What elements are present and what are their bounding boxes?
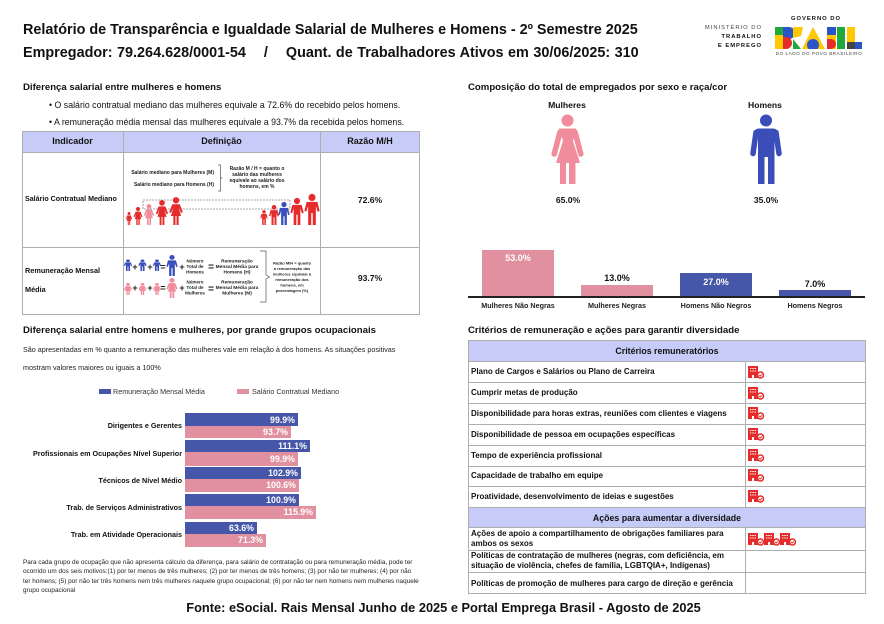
title: Empregador: 79.264.628/0001-54 / Quant. de Trabalhadores Ativos em 30/06/2025: 310	[23, 45, 639, 61]
group: Técnicos	[98, 467, 301, 492]
diagram: salário mediano: homens, em %	[239, 184, 275, 190]
group: Serviços Administrativos: Trab. de Serviços Administrativos	[66, 503, 182, 512]
ação 3: Políticas de promoção de mulheres para cargo de direção e gerência	[471, 579, 733, 588]
ação 2	[471, 551, 724, 570]
text block: nota de rodapé: ocorrido um dos seis motivos:(1) por ter menos de três mulheres; (2) por ter menos de três homens; (3) por não ter mulheres; (4) por não	[23, 568, 411, 575]
panel: tabela de critérios	[468, 340, 866, 594]
diagram: remuneração média: =	[160, 262, 166, 272]
heading: diferença por grupos ocupacionais: Diferença salarial entre homens e mulheres, por grande grupos ocupacionais	[23, 325, 376, 336]
bar chart: raça/cor: 27.0%	[703, 277, 729, 287]
group: Profissionais: 111.1%	[278, 441, 307, 451]
diagram: salário mediano: salário das mulheres	[232, 172, 282, 178]
label: Mulheres: Mulheres	[548, 100, 586, 110]
bar chart: raça/cor: 53.0%	[505, 253, 531, 263]
diagram: remuneração média: Mulheres	[185, 291, 205, 296]
diagram: remuneração média: Homens (H)	[224, 270, 251, 276]
icon: mulher	[552, 114, 584, 184]
bar: Homens Negros	[779, 290, 851, 296]
legend	[99, 387, 339, 396]
diagram: remuneração média: remuneração dos	[275, 277, 309, 282]
critério 1: Plano de Cargos e Salários ou Plano de Carreira	[471, 367, 655, 376]
bar: Homens Não Negros	[680, 273, 752, 296]
value: 65.0%: 65.0%	[556, 195, 580, 205]
text block: explicação	[23, 345, 396, 372]
ação 1	[471, 529, 724, 548]
diagram: remuneração média: Número	[186, 259, 204, 264]
group: Dirigentes e Gerentes: Dirigentes e Gerentes	[108, 421, 182, 430]
diagram: remuneração média: homens, em	[280, 282, 304, 288]
diagram: salário mediano: equivale ao salário dos	[229, 178, 285, 184]
group: Dirigentes e Gerentes	[108, 413, 298, 438]
ação 2: situação de violência, chefes de família, LGBTQIA+, Indígenas)	[471, 561, 710, 570]
icon: homem	[750, 114, 782, 184]
heading: critérios: Critérios de remuneração e ações para garantir diversidade	[468, 325, 739, 336]
diagram: remuneração média: +	[132, 283, 138, 293]
label: Homens: Homens	[748, 100, 782, 110]
critério 4: Disponibilidade de pessoa em ocupações específicas	[471, 430, 675, 439]
ação 2: Políticas de contratação de mulheres (negras, com deficiência, em	[471, 551, 724, 560]
diagram: salário mediano: Salário mediano para Homens (H)	[134, 182, 214, 188]
critério 6: Capacidade de trabalho em equipe	[471, 471, 603, 480]
logo: Ministério do Trabalho e Emprego	[705, 24, 762, 49]
panel: tabela de indicadores: Definição	[201, 136, 242, 146]
text block: nota de rodapé: grupo ocupacional	[23, 587, 75, 594]
diagram: remuneração média: =	[208, 262, 214, 273]
panel: tabela de indicadores	[22, 131, 420, 315]
group: Técnicos: 100.6%	[266, 480, 296, 490]
critério 3: Disponibilidade para horas extras, reuniões com clientes e viagens	[471, 409, 727, 418]
bar chart: raça/cor	[468, 250, 865, 310]
row value: 72.6%: 72.6%	[358, 195, 382, 205]
axis labels	[481, 301, 843, 310]
diagram: remuneração média: a remuneração das	[274, 266, 311, 271]
logo: Ministério do Trabalho e Emprego: MINISTÉRIO DO	[705, 25, 762, 31]
diagram: remuneração média	[124, 250, 312, 302]
group: Serviços Administrativos: 115.9%	[284, 507, 313, 517]
critério 2: Cumprir metas de produção	[471, 388, 578, 397]
text block: bullets: • O salário contratual mediano das mulheres equivale a 72.6% do recebido pelos homens.	[49, 100, 400, 110]
diagram: remuneração média: +	[179, 262, 185, 272]
panel: tabela de indicadores: Razão M/H	[347, 136, 393, 146]
axis labels: Homens Negros	[787, 301, 843, 310]
group: Atividade Operacionais: Trab. em Atividade Operacionais	[71, 530, 182, 539]
bar: Mulheres Negras	[581, 285, 653, 296]
table header	[22, 131, 420, 152]
text block: explicação: São apresentadas em % quanto a remuneração das mulheres vale em relação à dos homens. As situações positivas	[23, 345, 395, 354]
diagram: remuneração média: +	[147, 262, 153, 272]
bar chart: grupos ocupacionais	[33, 413, 316, 547]
axis labels: Mulheres Negras	[588, 301, 646, 310]
ação 1: Ações de apoio a compartilhamento de obrigações familiares para	[471, 529, 724, 538]
diagram: remuneração média: Mensal Média para	[216, 285, 259, 291]
group: Profissionais: 99.9%	[270, 454, 295, 464]
icons: ações adotadas	[748, 533, 796, 546]
text block: nota de rodapé: ter homens; (5) por não ter três homens nem três mulheres naquele grupo ocupacional; (6) por não ter nem homens nem mulheres naquele	[23, 578, 419, 585]
diagram: remuneração média: Homens	[186, 270, 204, 275]
diagram: remuneração média: Remuneração	[221, 259, 253, 265]
diagram: remuneração média: Remuneração	[221, 280, 253, 286]
header: critérios remuneratórios: Critérios remuneratórios	[615, 346, 719, 356]
header: ações diversidade: Ações para aumentar a diversidade	[593, 513, 741, 523]
group: Profissionais: Profissionais em Ocupações Nível Superior	[33, 449, 182, 458]
group: Dirigentes e Gerentes: 99.9%	[270, 415, 295, 425]
diagram: remuneração média: +	[132, 262, 138, 272]
critério 7: Proatividade, desenvolvimento de ideias e sugestões	[471, 492, 674, 501]
group: Técnicos: 102.9%	[268, 468, 298, 478]
diagram: remuneração média: +	[147, 283, 153, 293]
title: Relatório de Transparência e Igualdade Salarial de Mulheres e Homens - 2º Semestre 2025	[23, 22, 638, 38]
diagram: remuneração média: Mensal Média para	[216, 264, 259, 270]
heading: diferença salarial: Diferença salarial entre mulheres e homens	[23, 82, 221, 93]
diagram: remuneração média: =	[160, 283, 166, 293]
heading: composição: Composição do total de empregados por sexo e raça/cor	[468, 82, 727, 93]
group: Profissionais	[33, 440, 310, 466]
diagram: salário mediano: Salário mediano para Mulheres (M)	[131, 170, 214, 176]
icons: critérios atendidos	[748, 366, 764, 503]
panel: mulheres	[548, 100, 586, 205]
fonte: Fonte: eSocial. Rais Mensal Junho de 2025 e Portal Emprega Brasil - Agosto de 2025	[186, 600, 701, 615]
value: 35.0%: 35.0%	[754, 195, 778, 205]
diagram: remuneração média: +	[179, 283, 185, 293]
logo: Governo do Brasil: DO LADO DO POVO BRASILEIRO	[776, 51, 862, 56]
row value: 93.7%: 93.7%	[358, 273, 382, 283]
axis labels: Mulheres Não Negras	[481, 301, 555, 310]
panel: homens	[748, 100, 782, 205]
logo: Governo do Brasil: GOVERNO DO	[791, 16, 841, 22]
group: Serviços Administrativos	[66, 494, 316, 519]
header: critérios remuneratórios	[468, 340, 866, 361]
diagram: remuneração média: Total de	[187, 285, 204, 290]
text block: nota de rodapé: Para cada grupo de ocupação que não apresenta cálculo da diferença, para salário de contratação ou para remuneração média, pode ter	[23, 559, 412, 566]
diagram: remuneração média: mulheres equivale à	[273, 272, 312, 276]
diagram: remuneração média: Razão M/H = quanto	[273, 260, 312, 266]
text block: explicação: mostram valores maiores ou iguais a 100%	[23, 363, 161, 372]
bar chart: raça/cor: 13.0%	[604, 273, 630, 283]
diagram: remuneração média: Número	[186, 280, 204, 285]
axis labels: Homens Não Negros	[681, 301, 751, 310]
text block: bullets: • A remuneração média mensal das mulheres equivale a 93.7% da recebida pelos homens.	[49, 117, 404, 127]
critério 5: Tempo de experiência profissional	[471, 451, 602, 460]
row label: salário contratual: Salário Contratual Mediano	[25, 195, 117, 203]
diagram: salário mediano	[126, 164, 320, 225]
ação 1: ambos os sexos	[471, 539, 533, 548]
group: Atividade Operacionais: 63.6%	[229, 523, 254, 533]
text block: nota de rodapé	[23, 559, 419, 594]
title	[23, 22, 639, 61]
group: Atividade Operacionais: 71.3%	[238, 535, 263, 545]
logo: Ministério do Trabalho e Emprego: TRABALHO	[721, 34, 762, 40]
diagram: salário mediano: Razão M / H = quanto o	[230, 166, 284, 172]
bar chart: raça/cor: 7.0%	[805, 279, 825, 289]
group: Dirigentes e Gerentes: 93.7%	[263, 427, 288, 437]
panel: tabela de indicadores: Indicador	[52, 136, 93, 146]
text block: bullets	[49, 100, 404, 127]
diagram: remuneração média: porcentagem (%)	[276, 288, 309, 293]
logo: Governo do Brasil	[775, 16, 862, 56]
diagram: remuneração média: =	[208, 284, 214, 295]
legend: Salário Contratual Mediano	[252, 387, 339, 396]
group: Técnicos: Técnicos de Nível Médio	[99, 476, 182, 485]
logo: Ministério do Trabalho e Emprego: E EMPREGO	[718, 43, 762, 49]
row label: remuneração: Remuneração Mensal	[25, 266, 100, 275]
row label: remuneração: Média	[25, 285, 46, 294]
row label: remuneração	[25, 266, 100, 294]
group: Atividade Operacionais	[70, 522, 266, 547]
legend: Remuneração Mensal Média	[113, 387, 205, 396]
diagram: remuneração média: Mulheres (M)	[222, 291, 252, 297]
header: ações diversidade	[468, 507, 866, 528]
bar: Mulheres Não Negras	[482, 250, 554, 296]
diagram: remuneração média: Total de	[187, 264, 204, 269]
group: Serviços Administrativos: 100.9%	[266, 495, 296, 505]
